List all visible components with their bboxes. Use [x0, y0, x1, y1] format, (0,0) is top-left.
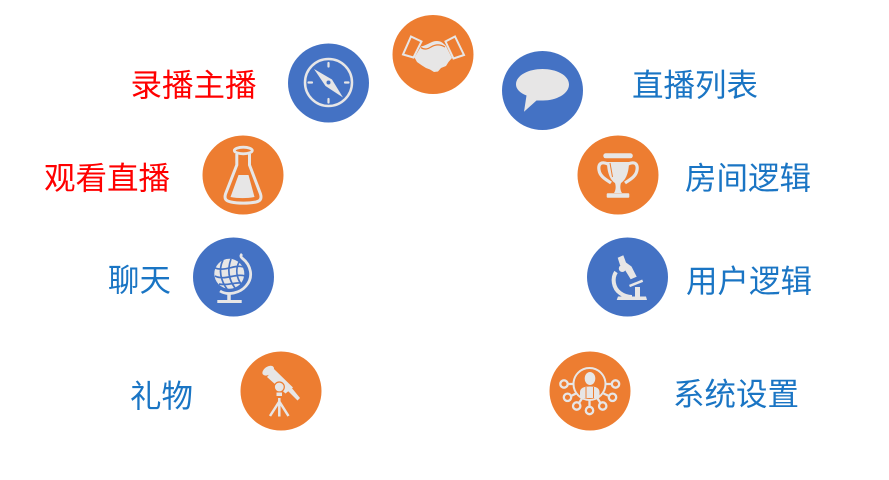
label: 聊天: 聊天 [108, 262, 171, 298]
icon: handshake [392, 15, 474, 94]
label: 礼物: 礼物 [130, 378, 193, 414]
icon: telescope [240, 352, 322, 430]
label: 直播列表: 直播列表 [632, 67, 758, 103]
icon: compass [288, 44, 369, 122]
icon: globe [193, 238, 274, 316]
label: 系统设置: 系统设置 [673, 376, 799, 412]
label: 观看直播: 观看直播 [44, 160, 170, 196]
label: 录播主播: 录播主播 [130, 67, 257, 103]
icon: flask [202, 136, 284, 214]
icon: microscope [587, 238, 668, 316]
icon: trophy [578, 136, 658, 214]
icon: network person [550, 352, 630, 430]
label: 用户逻辑: 用户逻辑 [686, 263, 812, 299]
icon: speech bubble [502, 51, 583, 130]
label: 房间逻辑: 房间逻辑 [685, 160, 811, 196]
